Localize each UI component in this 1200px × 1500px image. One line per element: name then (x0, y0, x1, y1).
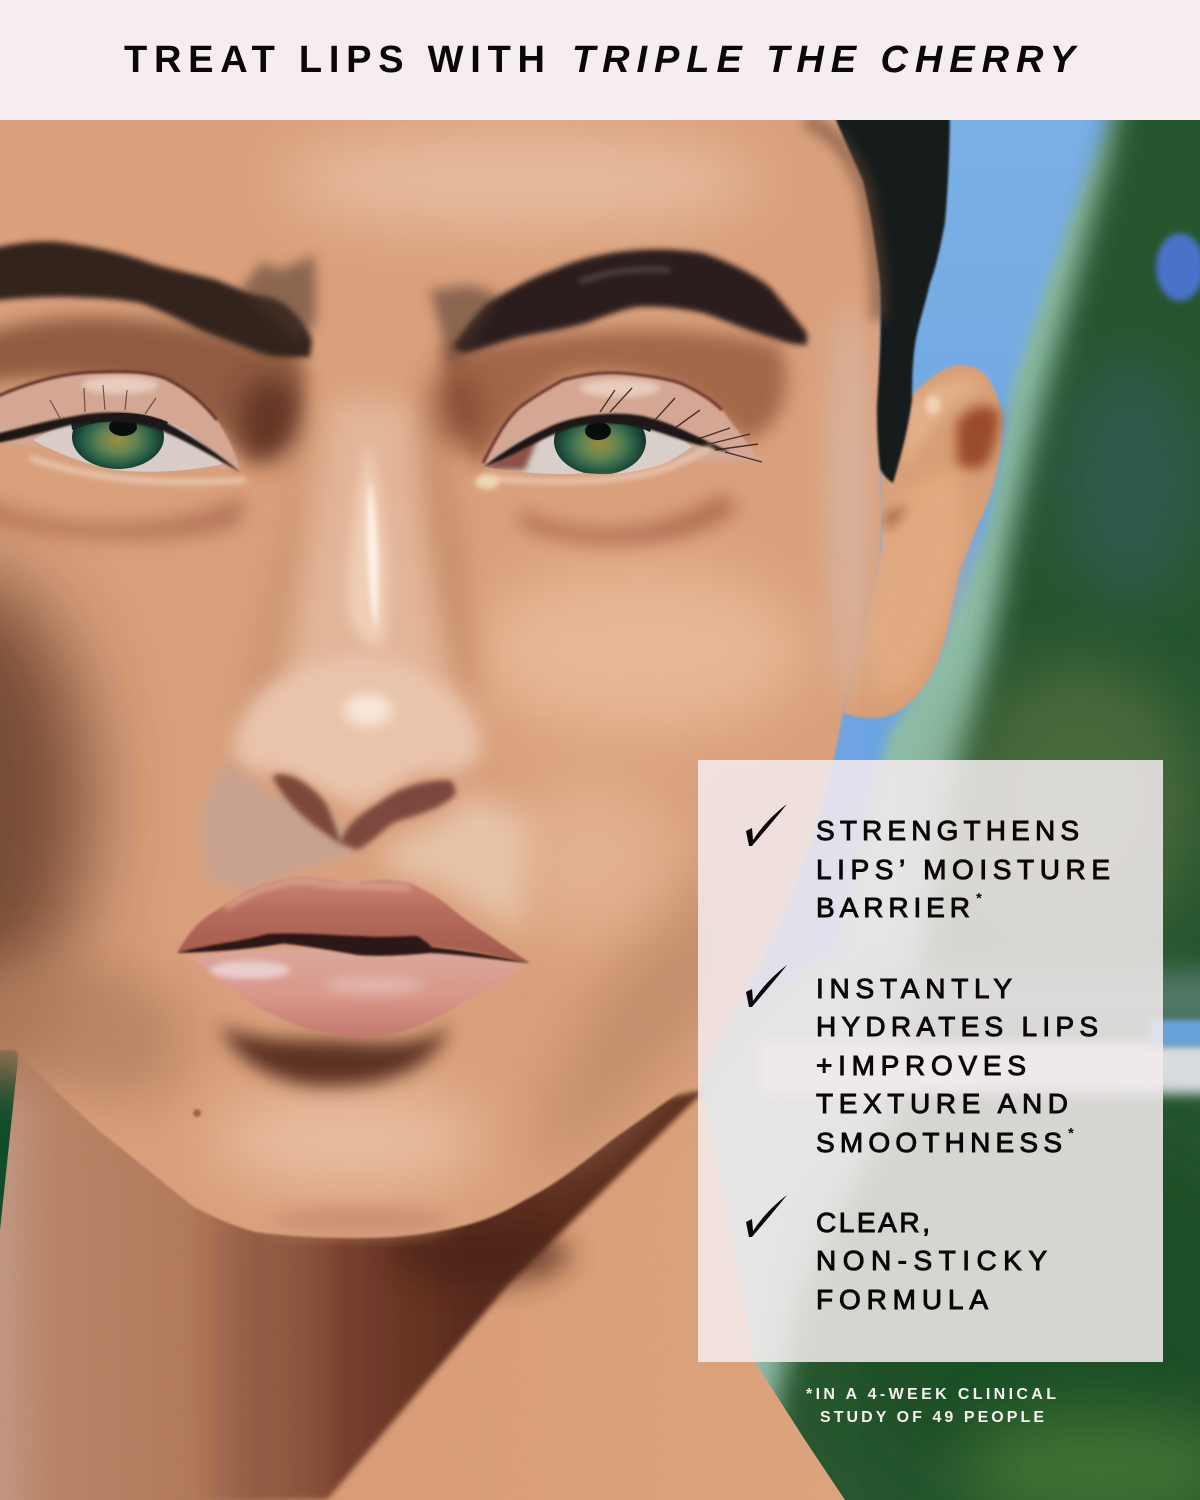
eyeball (485, 416, 692, 474)
title: TREAT LIPS WITH (124, 39, 545, 81)
lash line (0, 412, 240, 472)
benefit text: SMOOTHNESS (816, 1127, 1062, 1158)
upper lid (483, 373, 760, 468)
footnote: *IN A 4-WEEK CLINICAL (806, 1386, 1056, 1403)
benefit text: LIPS’ MOISTURE (816, 854, 1110, 885)
benefit 3 (746, 1195, 1047, 1315)
lower lip shimmer (210, 961, 290, 979)
benefit text: * (1068, 1125, 1074, 1142)
benefit text: * (976, 890, 982, 907)
benefit 2 (746, 965, 1098, 1158)
upper lip (177, 876, 530, 963)
title banner (0, 0, 1200, 120)
right cheek highlight (475, 565, 805, 735)
ear hollow (957, 406, 1000, 468)
nostril: left (272, 774, 342, 845)
neck (0, 1040, 870, 1500)
benefit text: FORMULA (816, 1284, 988, 1315)
hair (805, 60, 950, 483)
lower right jaw shade (536, 880, 698, 1188)
nose bridge (285, 400, 450, 680)
face (0, 60, 881, 1238)
left cheek shadow (0, 570, 90, 1030)
mouth line (177, 933, 530, 963)
eye: left (0, 372, 246, 482)
eyebrow: left (0, 241, 316, 358)
lash line (483, 414, 730, 467)
benefit text: HYDRATES LIPS (816, 1011, 1098, 1042)
eye: right (475, 373, 762, 489)
forehead sheen (280, 130, 760, 230)
title: TRIPLE THE CHERRY (572, 39, 1079, 81)
lower lip (190, 949, 525, 1038)
benefit text: CLEAR, (816, 1207, 930, 1238)
eyebrow: right (430, 249, 807, 365)
benefit text: INSTANTLY (816, 973, 1012, 1004)
benefit text: +IMPROVES (816, 1050, 1026, 1081)
skin grain (0, 120, 860, 1500)
benefit text: BARRIER (816, 892, 970, 923)
chin (215, 1092, 485, 1188)
nose bridge highlight (348, 440, 387, 646)
face edge sheen (828, 300, 872, 700)
mauve philtrum shade (200, 760, 357, 893)
eyeball (33, 413, 222, 472)
nose (200, 380, 530, 930)
benefit text: NON-STICKY (816, 1245, 1047, 1276)
nostril: right and philtrum shadow (340, 780, 456, 850)
upper lip highlight (380, 795, 530, 930)
left cheek tone (50, 980, 190, 1100)
jaw shadow on neck (180, 1090, 705, 1500)
shadow below lower lip (219, 1025, 450, 1086)
panel: benefits (698, 760, 1163, 1362)
icon: check (746, 1195, 787, 1237)
lower lid (30, 458, 246, 482)
lower lid (482, 447, 712, 481)
benefit text: STRENGTHENS (816, 815, 1079, 846)
nose tip highlight (344, 694, 392, 726)
footnote: STUDY OF 49 PEOPLE (820, 1409, 1044, 1426)
benefit text: TEXTURE AND (816, 1088, 1068, 1119)
iris (554, 407, 646, 475)
icon: check (746, 804, 787, 846)
upper lid (0, 372, 240, 470)
icon: check (746, 965, 787, 1007)
benefit 1 (746, 804, 1110, 923)
eye sockets (0, 317, 305, 465)
ear (843, 365, 1002, 718)
iris (72, 405, 164, 469)
lips (177, 876, 530, 1038)
nose tip (233, 655, 482, 807)
